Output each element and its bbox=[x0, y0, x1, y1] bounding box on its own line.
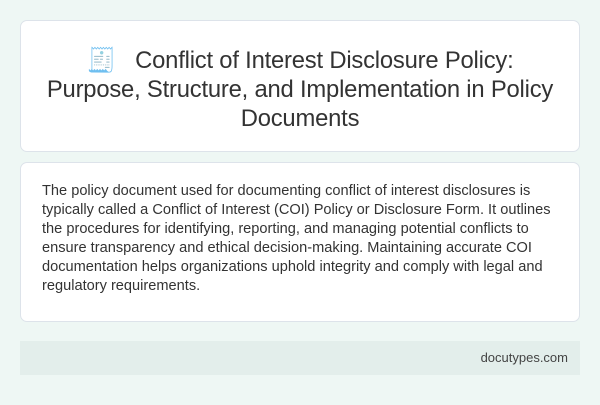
text block bbox=[42, 183, 551, 294]
panel: description bbox=[20, 162, 580, 322]
text block: documentation helps organizations uphold integrity and comply with legal and bbox=[42, 259, 543, 275]
title bbox=[47, 46, 554, 132]
text block: the procedures for identifying, reporting, and managing potential conflicts to bbox=[42, 221, 529, 237]
footer: docutypes.com bbox=[481, 350, 568, 365]
title: Documents bbox=[241, 105, 359, 132]
title: 🧾 Conflict of Interest Disclosure Policy: bbox=[86, 47, 514, 74]
title: Purpose, Structure, and Implementation in Policy bbox=[47, 76, 553, 103]
text block: regulatory requirements. bbox=[42, 278, 200, 294]
text block: typically called a Conflict of Interest (COI) Policy or Disclosure Form. It outlines bbox=[42, 202, 551, 218]
title card bbox=[20, 20, 580, 152]
text block: The policy document used for documenting conflict of interest disclosures is bbox=[42, 183, 530, 199]
footer bbox=[20, 341, 580, 375]
text block: ensure transparency and ethical decision-making. Maintaining accurate COI bbox=[42, 240, 532, 256]
